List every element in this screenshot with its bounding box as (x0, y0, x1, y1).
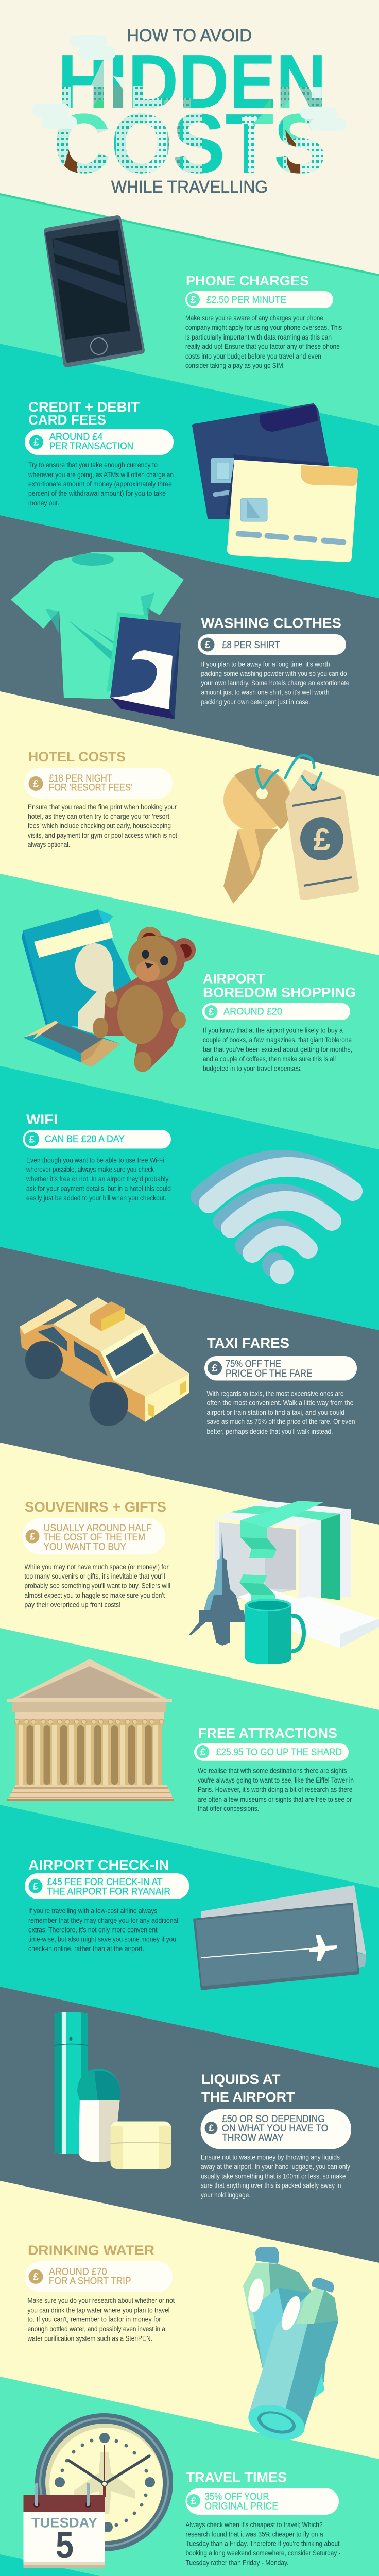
icon: washing powder box (110, 617, 181, 719)
body text: Ensure not to waste money by throwing any liquids (201, 2154, 340, 2161)
body text: time-wise, but also might save you some money if you (28, 1935, 176, 1943)
icon: smartphone (47, 219, 141, 364)
band: card fees (0, 344, 379, 598)
price pill: ORIGINAL PRICE (205, 2501, 278, 2512)
body text (25, 1563, 170, 1608)
body text: couple of books, a few magazines, that giant Toblerone (203, 1036, 352, 1044)
price pill: £25.95 TO GO UP THE SHARD (216, 1747, 342, 1758)
icon: teal string (256, 755, 321, 788)
panel: drinking water (25, 2243, 338, 2446)
body text (28, 803, 177, 849)
icon: cream jar (110, 2122, 171, 2169)
title line: how to avoid: HOW TO AVOID (127, 26, 252, 45)
heading: CARD FEES (28, 412, 106, 428)
cloud (300, 107, 347, 131)
heading: WIFI (26, 1112, 58, 1127)
body text: If you know that at the airport you're likely to buy a (203, 1026, 343, 1035)
body text: If you plan to be away for a long time, it's worth (201, 660, 330, 668)
panel: title (32, 26, 347, 196)
body text (26, 1156, 171, 1202)
price pill: £ (33, 1882, 39, 1892)
heading: THE AIRPORT (201, 2090, 295, 2105)
icon: calendar: TUESDAY (31, 2515, 97, 2531)
heading: PHONE CHARGES (186, 273, 309, 289)
body text: Tuesday than a Friday. Therefore if you're thinking about (185, 2540, 340, 2547)
price pill (23, 1130, 171, 1149)
body text: Tuesday rather than Friday - Monday. (185, 2558, 288, 2567)
body text: to. If you can't, remember to factor in money for (28, 2315, 161, 2324)
price pill: £ (212, 1363, 218, 1374)
panel: hotel costs (24, 749, 359, 904)
body text (207, 1390, 355, 1435)
title line: while travelling: WHILE TRAVELLING (111, 177, 268, 196)
icon: clock (35, 2413, 173, 2551)
body text: check-in online, rather than at the airport. (28, 1945, 144, 1953)
panel: free attractions (7, 1659, 354, 1812)
icon: book (22, 909, 132, 1033)
price pill: £ (200, 1747, 206, 1758)
price pill: £ (33, 779, 39, 789)
price pill: CAN BE £20 A DAY (45, 1134, 125, 1145)
price pill: FOR A SHORT TRIP (49, 2276, 131, 2286)
band: airport shopping (0, 874, 379, 1149)
price pill: 75% OFF THE (226, 1359, 281, 1369)
band: taxi fares (0, 1247, 379, 1525)
heading: WASHING CLOTHES (201, 615, 341, 631)
heading: AIRPORT (203, 971, 265, 986)
price pill: £50 OR SO DEPENDING (222, 2114, 325, 2125)
heading: FREE ATTRACTIONS (198, 1725, 337, 1741)
price pill: £ (33, 437, 39, 448)
icon: boarding pass folder (193, 1885, 366, 1990)
price pill: £ (33, 2272, 39, 2282)
body text: hotel, as they can often try to charge you for 'resort (28, 812, 169, 820)
body text: wherever possible, always make sure you check (26, 1165, 154, 1174)
price pill (185, 291, 333, 308)
price pill (23, 1518, 166, 1555)
band: flight luggage (0, 2554, 379, 2576)
body text: water purification system such as a SteriPEN. (27, 2335, 152, 2342)
body text: extortionate amount of money (approximately three (28, 480, 172, 488)
price pill: PRICE OF THE FARE (226, 1368, 312, 1379)
body text: your hold luggage. (201, 2191, 250, 2199)
body text: Always check when it's cheapest to travel; Which? (185, 2521, 322, 2529)
price pill: £ (205, 640, 211, 650)
heading: HOTEL COSTS (28, 749, 126, 765)
body text (185, 2521, 341, 2567)
price pill: £8 PER SHIRT (222, 640, 280, 651)
icon: eiffel tower (188, 1533, 245, 1646)
band: hotel costs (0, 691, 379, 955)
price pill: £ (30, 1531, 36, 1543)
price pill: YOU WANT TO BUY (43, 1541, 126, 1553)
price pill: £ (191, 2496, 197, 2507)
body text: wherever you are going, as ATMs will often charge an (28, 471, 174, 479)
body text: Try to ensure that you take enough currency to (28, 461, 158, 469)
body text: amount just to wash one shirt, so it's well worth (201, 688, 330, 697)
price pill: £ (191, 295, 196, 306)
price pill: ON WHAT YOU HAVE TO (222, 2123, 329, 2134)
body text: Even though you want to be able to use free Wi-Fi (26, 1156, 164, 1164)
body text: While you may not have much space (or money!) for (25, 1563, 169, 1571)
body text: packing some washing powder with you so you can do (201, 670, 347, 677)
body text (201, 660, 349, 706)
body text: better, perhaps decide that you'll walk instead. (207, 1428, 333, 1435)
band: phone charges (0, 193, 379, 426)
body text: Ensure that you read the fine print when booking your (28, 803, 177, 811)
heading: TAXI FARES (207, 1335, 289, 1351)
heading: CREDIT + DEBIT (28, 399, 140, 415)
price pill: £18 PER NIGHT (49, 773, 112, 784)
body text: We realise that with some destinations there are sights (198, 1767, 347, 1774)
body text: is particularly important with data roaming as this can (185, 333, 332, 341)
price pill (204, 1356, 357, 1381)
price pill (185, 2488, 339, 2515)
body text: research found that it was 35% cheaper to fly on a (185, 2531, 323, 2538)
icon: price tag (285, 769, 359, 900)
body text: fees' which include checking out early, housekeeping (28, 822, 171, 829)
price pill (194, 1743, 349, 1761)
body text: ask for your payment details, but in a hotel this could (26, 1185, 171, 1192)
heading (203, 971, 356, 1001)
icon: roll-on deodorant (77, 2069, 120, 2162)
icon: t-shirt (11, 552, 184, 699)
body text: whether it's free or not. In an airport they'd probably (26, 1175, 169, 1183)
title word: costs (57, 113, 323, 174)
icon: calendar: 5 (56, 2525, 74, 2566)
body text: bar that you've been excited about getting for months, (203, 1046, 352, 1053)
price pill: 35% OFF YOUR (205, 2492, 269, 2502)
panel: credit and debit card fees (25, 399, 358, 562)
panel: washing clothes (11, 552, 349, 719)
body text: save as much as 75% off the price of the fare. Or even (207, 1418, 355, 1426)
panel: phone charges (47, 219, 342, 369)
body text: usually take something that is 100ml or less, so make (201, 2172, 346, 2180)
body text (28, 1907, 178, 1953)
body text: budgeted in to your travel expenses. (203, 1064, 302, 1073)
title word: costs: COSTS (54, 96, 326, 191)
icon: chocolate bar (23, 1021, 120, 1067)
body text (28, 461, 174, 507)
band: washing clothes (0, 515, 379, 776)
panel: liquids at the airport (55, 2012, 351, 2199)
body text: money out. (28, 499, 59, 507)
body text: company might apply for using your phone overseas. This (185, 324, 342, 331)
body text: often the most convenient. Walk a little way from the (207, 1399, 353, 1406)
icon: teddy bear (93, 927, 196, 1072)
icon: spray bottle (55, 2012, 88, 2154)
price pill (25, 2261, 173, 2292)
price pill (202, 1003, 350, 1020)
body text (185, 314, 342, 369)
price pill: THE AIRPORT FOR RYANAIR (47, 1887, 170, 1897)
band: liquids (0, 1987, 379, 2263)
heading: BOREDOM SHOPPING (203, 985, 356, 1001)
panel: wifi (23, 1112, 353, 1284)
heading: DRINKING WATER (28, 2243, 154, 2258)
body text: With regards to taxis, the most expensive ones are (207, 1390, 344, 1397)
panel: travel times (24, 2413, 341, 2568)
body text: your own laundry. Some hotels charge an extortionate (201, 679, 349, 687)
heading: LIQUIDS AT (201, 2072, 281, 2087)
body text: that offer concessions. (198, 1805, 259, 1812)
heading (28, 399, 140, 428)
icon: classical temple (7, 1659, 174, 1801)
icon: calendar (24, 2484, 105, 2568)
title word: hidden (62, 55, 322, 108)
body text: Make sure you're aware of any charges your phone (185, 314, 323, 322)
band: souvenirs (0, 1443, 379, 1710)
body text: really add up! Ensure that you factor any of these phone (185, 343, 340, 350)
icon: mug (245, 1599, 304, 1664)
body text: too many souvenirs or gifts, it's inevitable that you'll (25, 1572, 165, 1580)
panel: taxi fares (20, 1297, 357, 1435)
price pill: THE COST OF THE ITEM (43, 1532, 145, 1543)
icon: hotel key (223, 768, 291, 904)
price pill (25, 429, 174, 455)
body text: are often a few museums or sights that are free to see or (198, 1795, 352, 1803)
body text: almost expect you to haggle so make sure you don't (25, 1591, 165, 1599)
price pill: AROUND £70 (49, 2267, 107, 2277)
body text: percent of the withdrawal amount) for you to take (28, 489, 166, 497)
body text: and a couple of coffees, then make sure this is all (203, 1055, 336, 1063)
price pill: PER TRANSACTION (49, 441, 133, 452)
price pill (198, 634, 346, 655)
body text: sure that anything over this is packed safely away in (201, 2181, 341, 2190)
body text: you're always going to want to see, like the Eiffel Tower in (198, 1776, 354, 1784)
body text (203, 1026, 352, 1073)
icon: wifi symbol (200, 1160, 353, 1284)
body text: Make sure you do your research about whether or not (28, 2297, 175, 2304)
body text: extras. Therefore, it's not only more convenient (28, 1926, 158, 1934)
band: free attractions (0, 1628, 379, 1888)
body text: always optional. (28, 841, 70, 849)
panel: airport boredom shopping (22, 909, 356, 1073)
body text: Paris. However, it's worth doing a bit of research as there (198, 1786, 352, 1793)
heading: AIRPORT CHECK-IN (28, 1857, 169, 1873)
body text: visits, and payment for gym or pool access which is not (28, 832, 177, 839)
body text: enough bottled water, and possibly even invest in a (28, 2325, 165, 2333)
price pill: £2.50 PER MINUTE (206, 295, 286, 306)
price pill: £ (209, 2123, 214, 2134)
band: wifi (0, 1066, 379, 1330)
body text (198, 1767, 354, 1812)
cloud (70, 35, 115, 60)
price pill: AROUND £4 (49, 432, 103, 443)
body text: consider taking a pay as you go SIM. (185, 362, 285, 369)
price pill: USUALLY AROUND HALF (43, 1523, 152, 1534)
heading (201, 2072, 295, 2105)
heading: TRAVEL TIMES (186, 2470, 287, 2485)
panel: airport check-in (25, 1857, 366, 1990)
body text: away at the airport. In your hand luggage, you can only (201, 2163, 350, 2171)
price pill (24, 768, 173, 799)
body text: airport or train station to find a taxi, and you could (207, 1409, 344, 1416)
price pill (201, 2109, 351, 2149)
cloud (32, 104, 77, 129)
price pill: £ (29, 1134, 35, 1145)
band: travel times (0, 2377, 379, 2576)
price pill: AROUND £20 (223, 1007, 282, 1017)
body text: pay their overpriced up front costs! (25, 1601, 120, 1608)
icon: taxi (20, 1297, 190, 1426)
price pill (25, 1873, 190, 1899)
price pill: £ (209, 1007, 214, 1018)
title word: hidden: HIDDEN (58, 39, 326, 124)
body text: costs into your budget before you travel and even (185, 352, 321, 360)
body text (201, 2154, 350, 2199)
band: airport check-in (0, 1805, 379, 2068)
icon: water bottles (243, 2247, 338, 2446)
body text (27, 2297, 175, 2342)
icon: credit cards (194, 405, 358, 562)
body text: you can drink the tap water where you plan to travel (28, 2306, 170, 2314)
body text: easily just be added to your bill when you checkout. (26, 1194, 166, 1202)
price pill: £45 FEE FOR CHECK-IN AT (47, 1877, 163, 1888)
price pill: FOR 'RESORT FEES' (49, 782, 132, 793)
price pill: THROW AWAY (222, 2133, 284, 2143)
icon: gift box (215, 1501, 379, 1648)
icon: price tag: £ (313, 822, 331, 857)
band: drinking water (0, 2181, 379, 2459)
body text: remember that they may charge you for any additional (28, 1917, 178, 1924)
background: cream header (0, 0, 379, 275)
heading: SOUVENIRS + GIFTS (25, 1499, 166, 1515)
panel: souvenirs and gifts (23, 1499, 379, 1664)
body text: packing your own detergent just in case. (201, 698, 310, 706)
body text: probably see something you'll want to buy. Sellers will (25, 1582, 170, 1590)
body text: booking a long weekend somewhere, consider Saturday - (185, 2549, 341, 2557)
body text: If you're travelling with a low-cost airline always (28, 1907, 158, 1914)
